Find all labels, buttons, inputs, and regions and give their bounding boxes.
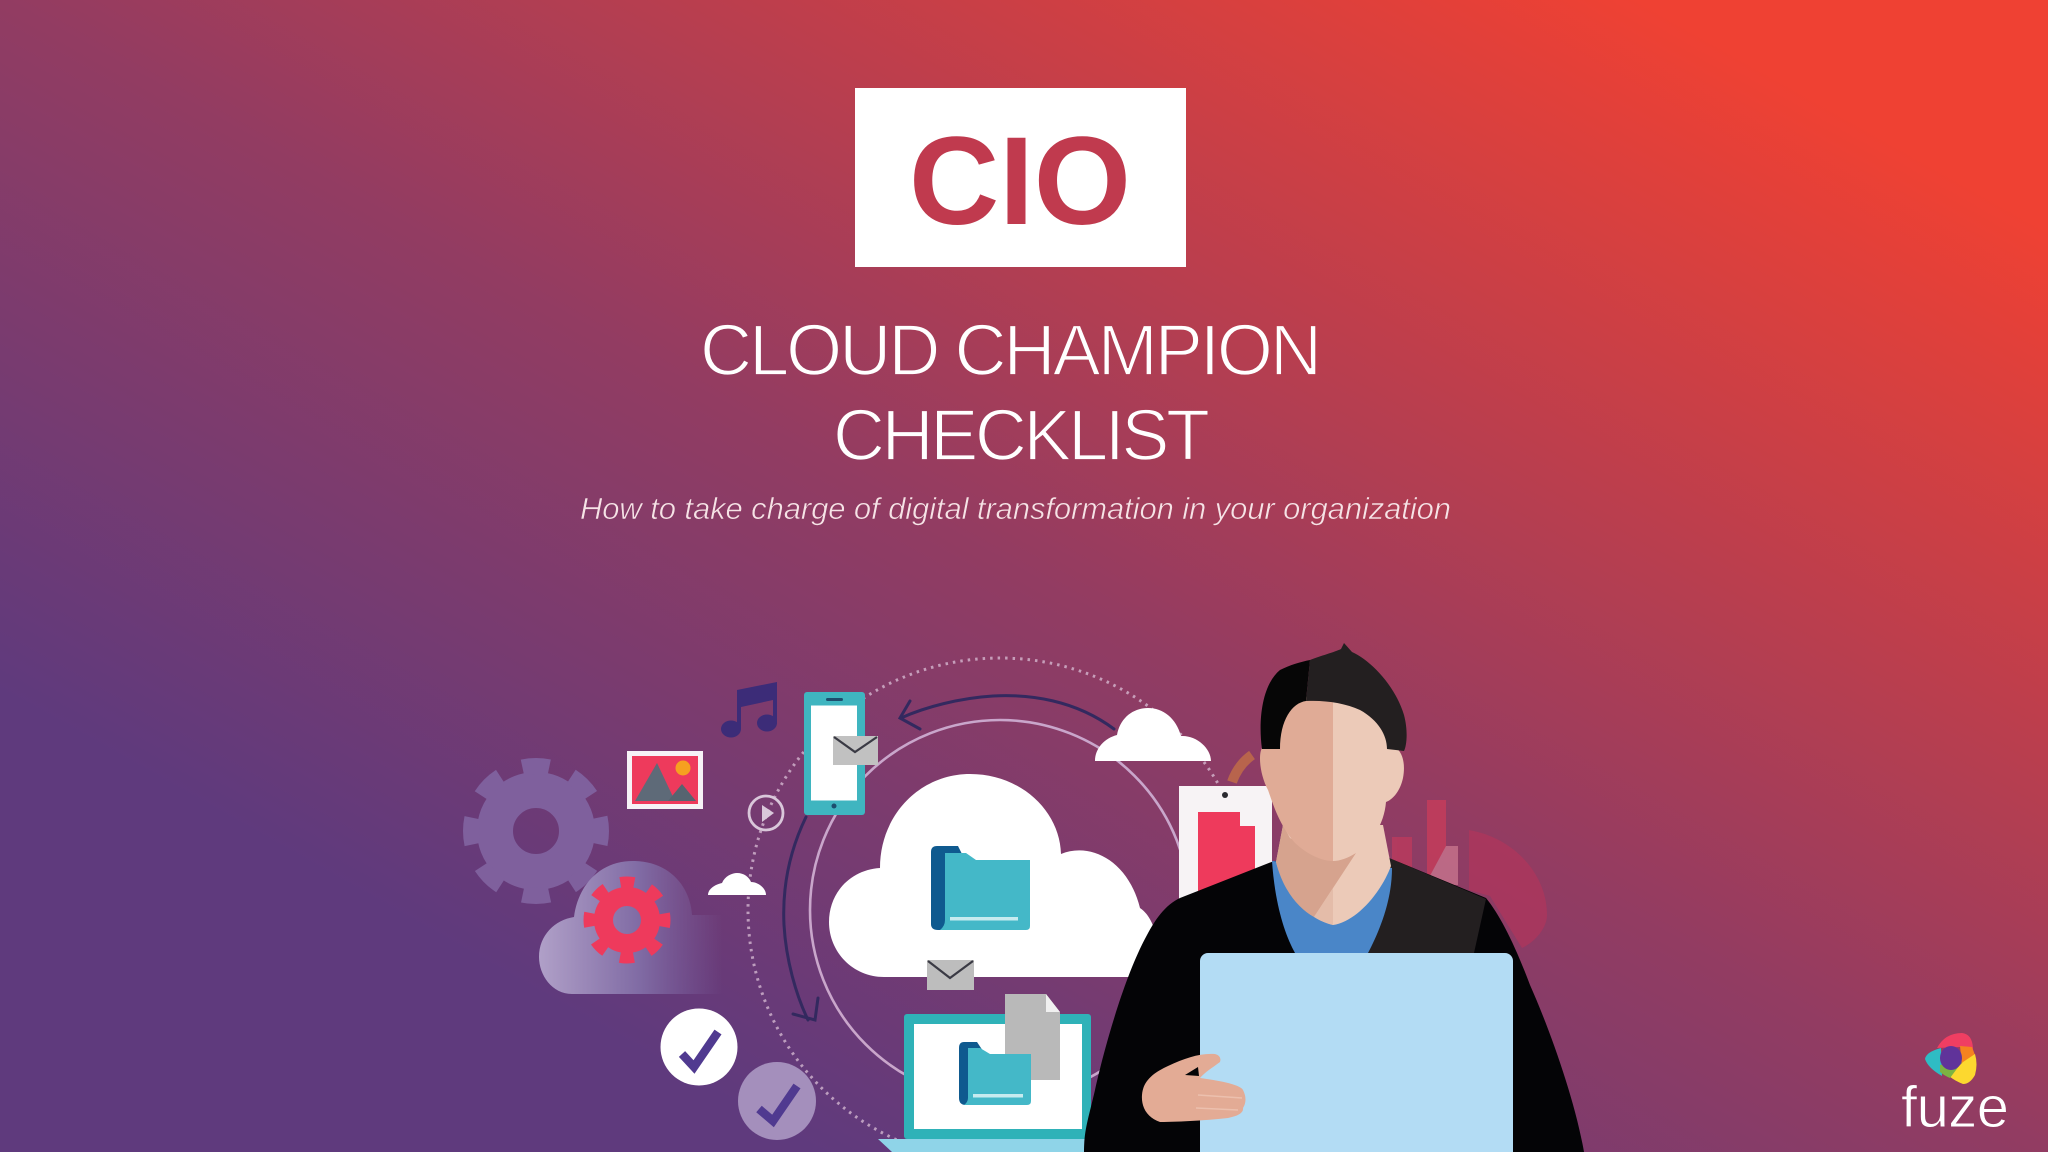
person: hair [1261, 643, 1407, 751]
orange arc behind head [1232, 755, 1252, 782]
person illustration [1084, 643, 1584, 1152]
title: CHECKLIST [833, 396, 1210, 476]
logo: wordmark: fuze [1901, 1075, 2009, 1140]
title [700, 311, 1322, 476]
solid orbit ring [810, 720, 1190, 1100]
arrow: top curved [900, 696, 1114, 729]
person: sweater [1084, 858, 1584, 1152]
icon: grey check circle [738, 1062, 816, 1140]
arrow: left curved [784, 817, 818, 1020]
fuze logo [1901, 1033, 2009, 1140]
person: laptop back held [1200, 953, 1513, 1152]
person: hand [1142, 1054, 1246, 1122]
person: neck [1276, 825, 1391, 925]
icon: tablet with red block [1179, 786, 1272, 906]
person: face [1260, 695, 1404, 861]
title: CLOUD CHAMPION [700, 311, 1322, 391]
CIO logo box: CIO [909, 112, 1131, 251]
icon: white check circle [660, 1008, 738, 1086]
subtitle: How to take charge of digital transformation in your organization [580, 491, 1451, 526]
faded bar chart behind person [1392, 800, 1458, 885]
icon: music note [721, 682, 777, 738]
icon: play button [749, 796, 783, 830]
icon: envelope below cloud [927, 960, 974, 990]
icon: picture [627, 751, 703, 809]
icon: laptop with folder and document [878, 994, 1098, 1152]
icon: phone with envelope [804, 692, 878, 815]
person: blue shirt [1272, 861, 1392, 953]
gear icon: grey [471, 766, 601, 896]
icon: gradient cloud with red gear [539, 861, 722, 994]
icon: small cloud left [708, 873, 766, 895]
dotted orbit ring [748, 658, 1252, 1152]
icon: small cloud top right [1095, 708, 1211, 761]
CIO logo box [855, 88, 1186, 267]
logo: overlapping coloured blobs [1925, 1033, 1976, 1084]
faded pie chart behind person [1469, 830, 1547, 948]
icon: main cloud with folder [829, 774, 1160, 977]
